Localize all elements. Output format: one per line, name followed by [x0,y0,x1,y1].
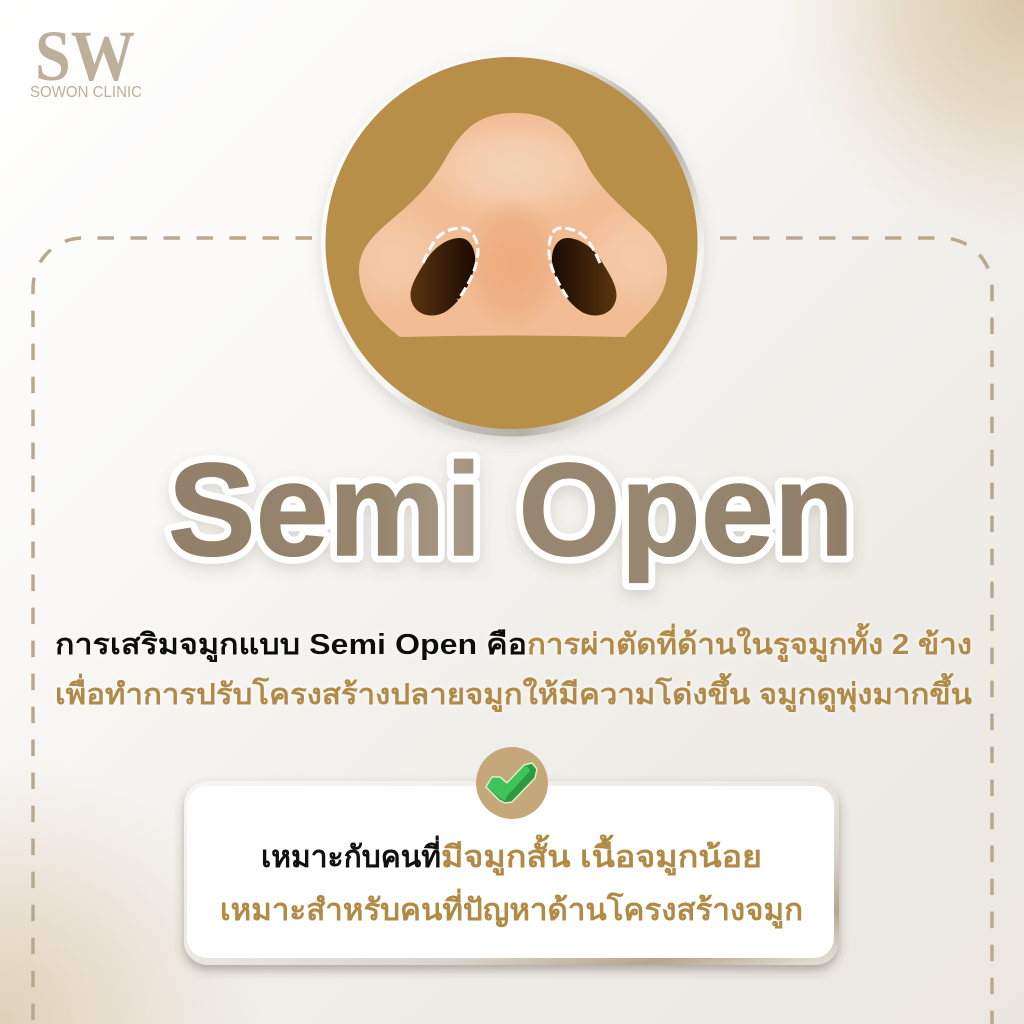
card text: มีจมูกสั้น เนื้อจมูกน้อย [441,834,762,876]
intro text [55,622,972,712]
card body [187,786,834,958]
circle ring [321,54,704,436]
left incision dashes [423,228,478,300]
suitability card [184,747,839,965]
nose shape [359,113,667,337]
logo: Sowon Clinic: SOWON CLINIC [30,84,142,101]
title: Semi Open: Semi Open [168,436,854,583]
check icon [486,763,537,803]
title: Semi Open: Semi Open [168,436,854,583]
card frame [184,781,839,965]
right nostril [552,238,616,315]
card text [220,834,803,929]
right incision dashes [549,228,600,300]
intro text: การเสริมจมูกแบบ Semi Open คือ [55,629,527,662]
card text: เหมาะกับคนที่ [261,835,441,874]
intro text: เพื่อทำการปรับโครงสร้างปลายจมูกให้มีความโด่งขึ้น จมูกดูพุ่งมากขึ้น [55,672,972,712]
dashed frame [33,238,992,1024]
card text: เหมาะสำหรับคนที่ปัญหาด้านโครงสร้างจมูก [220,888,803,929]
intro text: การผ่าตัดที่ด้านในรูจมูกทั้ง 2 ข้าง [527,622,972,662]
check badge [476,747,548,819]
nose illustration circle [321,54,704,436]
logo: Sowon Clinic: SW [35,16,135,96]
left nostril [411,238,475,315]
circle gold fill [326,57,698,429]
